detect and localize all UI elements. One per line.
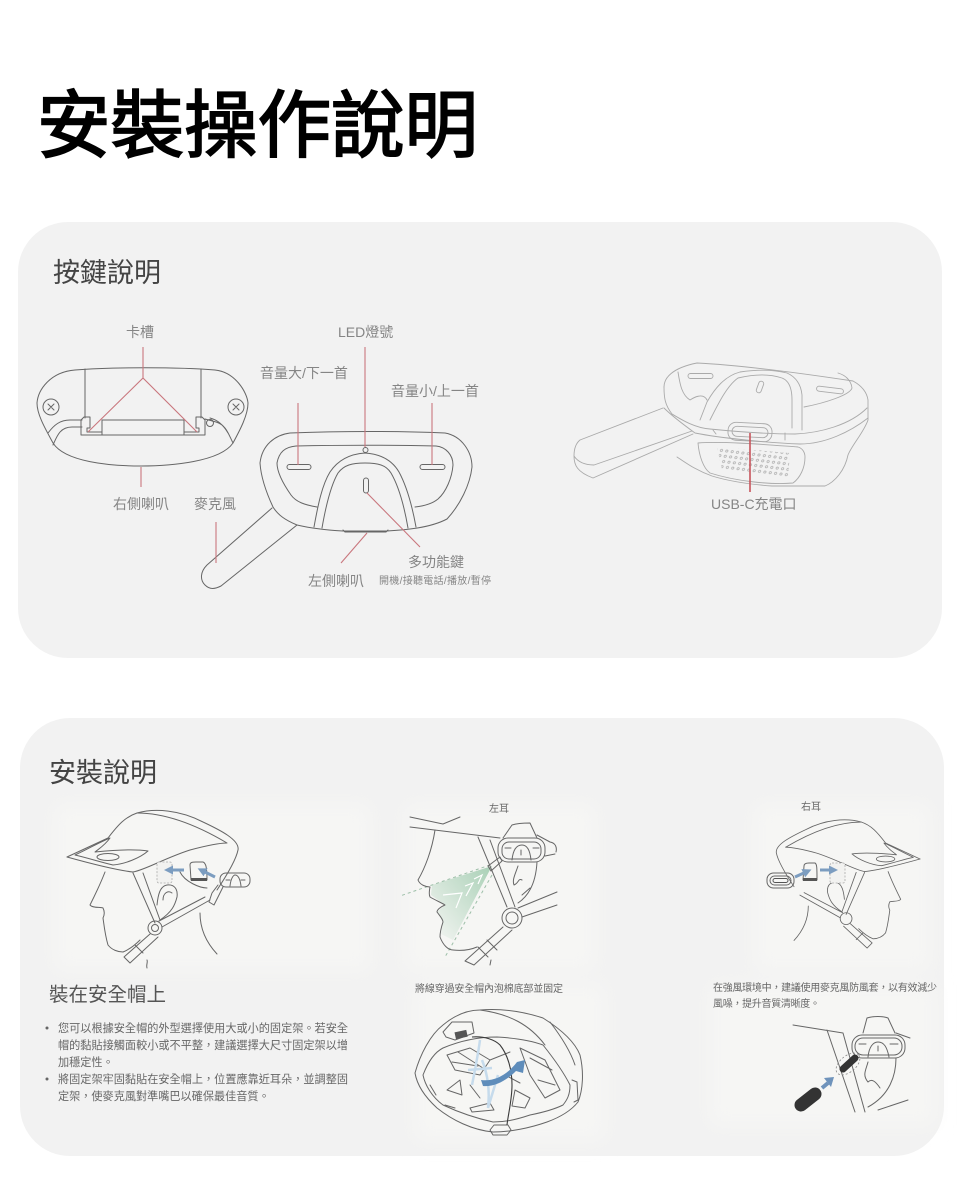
diagram: left unit [201,432,472,588]
labels: 麥克風 [194,496,236,512]
heading: button guide: 按鍵說明 [53,258,161,288]
illustration: left ear microphone position: 左耳 [489,802,509,815]
caption: wind noise tip: 風噪，提升音質清晰度。 [713,997,820,1010]
illustration: helmet interior cable routing [415,1009,582,1135]
labels: 音量小/上一首 [391,383,479,399]
illustration: left ear microphone position [400,802,557,965]
labels [113,324,797,589]
panel: installation guide [20,718,944,1156]
diagram: right unit [37,368,248,466]
labels: 左側喇叭 [308,573,364,589]
text: instructions list: 定架，使麥克風對準嘴巴以確保最佳音質。 [58,1089,270,1103]
illustration: microphone windscreen [793,1016,910,1112]
labels: USB-C充電口 [711,496,797,512]
illustration: helmet right side: 右耳 [801,800,821,813]
labels: 開機/接聽電話/播放/暫停 [379,574,491,587]
text: instructions list: 您可以根據安全帽的外型選擇使用大或小的固定架。若安全 [58,1021,348,1035]
subheading: mount on helmet: 裝在安全帽上 [49,984,166,1006]
callout lines [88,347,750,563]
caption: route cable: 將線穿過安全帽內泡棉底部並固定 [415,982,563,995]
text: instructions list: 將固定架牢固黏貼在安全帽上，位置應靠近耳朵，並調整固 [58,1072,348,1086]
text: instructions list: 加穩定性。 [58,1055,114,1069]
labels: 右側喇叭 [113,496,169,512]
title: 安裝操作說明 [37,84,478,167]
caption: wind noise tip: 在強風環境中，建議使用麥克風防風套，以有效減少 [713,981,937,994]
panel background [18,222,942,658]
labels: LED燈號 [338,324,393,340]
panel background [20,718,944,1156]
photo backgrounds [55,805,935,1140]
labels: 多功能鍵 [408,554,464,570]
diagram: charging view [574,363,868,486]
labels: 卡槽 [126,324,154,340]
text: instructions list [46,1021,348,1103]
labels: 音量大/下一首 [260,365,348,381]
sound pickup wedge [431,866,492,940]
panel: button guide [18,222,942,658]
heading: installation guide: 安裝說明 [49,758,157,788]
illustration: helmet left side [67,810,250,968]
caption: wind noise tip [713,981,937,1010]
text: instructions list: 帽的黏貼接觸面較小或不平整，建議選擇大尺寸固定架以增 [58,1038,348,1052]
illustration: helmet right side [767,800,920,948]
